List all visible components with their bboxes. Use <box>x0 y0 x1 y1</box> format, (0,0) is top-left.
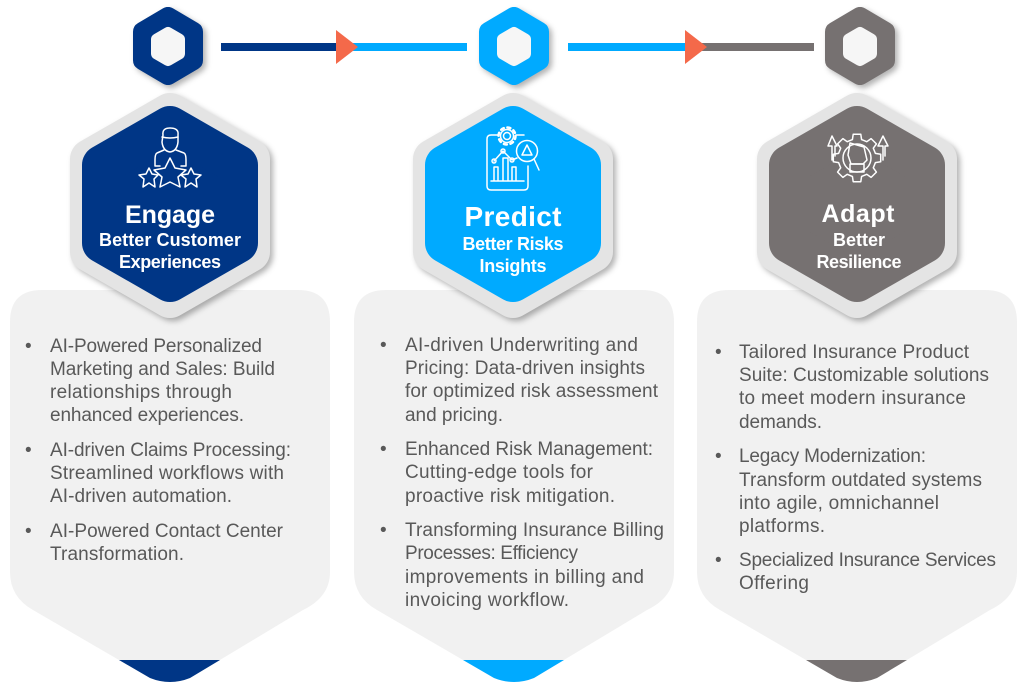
connector: predict to adapt <box>568 30 814 64</box>
text block: predict bullets: • <box>380 520 387 541</box>
icon: risk analytics chart <box>487 128 539 190</box>
text block: predict bullets: improvements in billing and <box>405 567 644 588</box>
text block: predict bullets <box>380 335 664 611</box>
text block: adapt bullets: Transform outdated systems <box>739 470 982 491</box>
subheading: Better Resilience: Better <box>833 230 885 250</box>
subheading: Better Risks Insights <box>462 234 564 276</box>
text block: predict bullets: AI-driven Underwriting and <box>405 335 638 356</box>
text block: predict bullets: • <box>380 439 387 460</box>
text block: adapt bullets: to meet modern insurance <box>739 388 966 409</box>
text block: adapt bullets: • <box>715 342 722 363</box>
subheading: Better Customer Experiences: Better Customer <box>99 230 241 250</box>
text block: engage bullets: • <box>25 521 32 542</box>
text block: adapt bullets: Legacy Modernization: <box>739 446 926 467</box>
text block: predict bullets: proactive risk mitigation. <box>405 486 615 507</box>
text block: predict bullets: Cutting-edge tools for <box>405 462 594 483</box>
subheading: Better Customer Experiences: Experiences <box>119 252 221 272</box>
icon: customer with stars <box>139 128 201 187</box>
badge: engage <box>90 113 250 298</box>
text block: engage bullets: Transformation. <box>50 544 184 565</box>
text block: adapt bullets: platforms. <box>739 516 825 537</box>
text block: engage bullets: AI-driven Claims Processing: <box>50 440 291 461</box>
text block: predict bullets: Transforming Insurance Billing <box>405 520 664 541</box>
icon: small adapt hexagon <box>835 17 885 75</box>
subheading: Better Resilience: Resilience <box>816 252 902 272</box>
text block: adapt bullets <box>715 342 996 594</box>
text block: adapt bullets: • <box>715 446 722 467</box>
text block: adapt bullets: Tailored Insurance Product <box>739 342 970 363</box>
text block: adapt bullets: • <box>715 550 722 571</box>
text block: predict bullets: Pricing: Data-driven insights <box>405 358 645 379</box>
text block: adapt bullets: Specialized Insurance Services <box>739 550 996 571</box>
text block: predict bullets: for optimized risk assessment <box>405 381 659 402</box>
icon: small predict hexagon <box>489 17 539 75</box>
text block: adapt bullets: demands. <box>739 412 822 433</box>
text block: engage bullets: • <box>25 440 32 461</box>
text block: engage bullets: relationships through <box>50 382 232 403</box>
text block: engage bullets: AI-driven automation. <box>50 486 232 507</box>
text block: adapt bullets: into agile, omnichannel <box>739 493 939 514</box>
text block: predict bullets: Processes: Efficiency <box>405 543 578 564</box>
text block: engage bullets: AI-Powered Contact Center <box>50 521 284 542</box>
subheading: Better Resilience <box>816 230 902 272</box>
icon: gear with fist and arrows <box>828 134 888 182</box>
subheading: Better Risks Insights: Insights <box>480 256 546 276</box>
text block: engage bullets <box>25 336 291 565</box>
text block: engage bullets: Streamlined workflows with <box>50 463 284 484</box>
subheading: Better Risks Insights: Better Risks <box>462 234 564 254</box>
text block: adapt bullets: Suite: Customizable solutions <box>739 365 989 386</box>
icon: small engage hexagon <box>143 17 193 75</box>
text block: predict bullets: and pricing. <box>405 405 503 426</box>
text block: adapt bullets: Offering <box>739 573 809 594</box>
text block: engage bullets: enhanced experiences. <box>50 405 244 426</box>
connector: engage to predict <box>221 30 467 64</box>
text block: predict bullets: invoicing workflow. <box>405 590 569 611</box>
heading: Engage: Engage <box>125 201 215 229</box>
badge: adapt <box>777 113 937 298</box>
text block: engage bullets: Marketing and Sales: Build <box>50 359 275 380</box>
text block: predict bullets: • <box>380 335 387 356</box>
badge: predict <box>433 113 593 298</box>
subheading: Better Customer Experiences <box>99 230 241 272</box>
text block: predict bullets: Enhanced Risk Management: <box>405 439 653 460</box>
text block: engage bullets: AI-Powered Personalized <box>50 336 262 357</box>
text block: engage bullets: • <box>25 336 32 357</box>
panel: engage details <box>10 290 330 682</box>
panel: adapt details <box>697 290 1017 682</box>
panel: predict details <box>354 290 674 682</box>
heading: Adapt: Adapt <box>822 200 895 228</box>
heading: Predict: Predict <box>464 201 562 232</box>
